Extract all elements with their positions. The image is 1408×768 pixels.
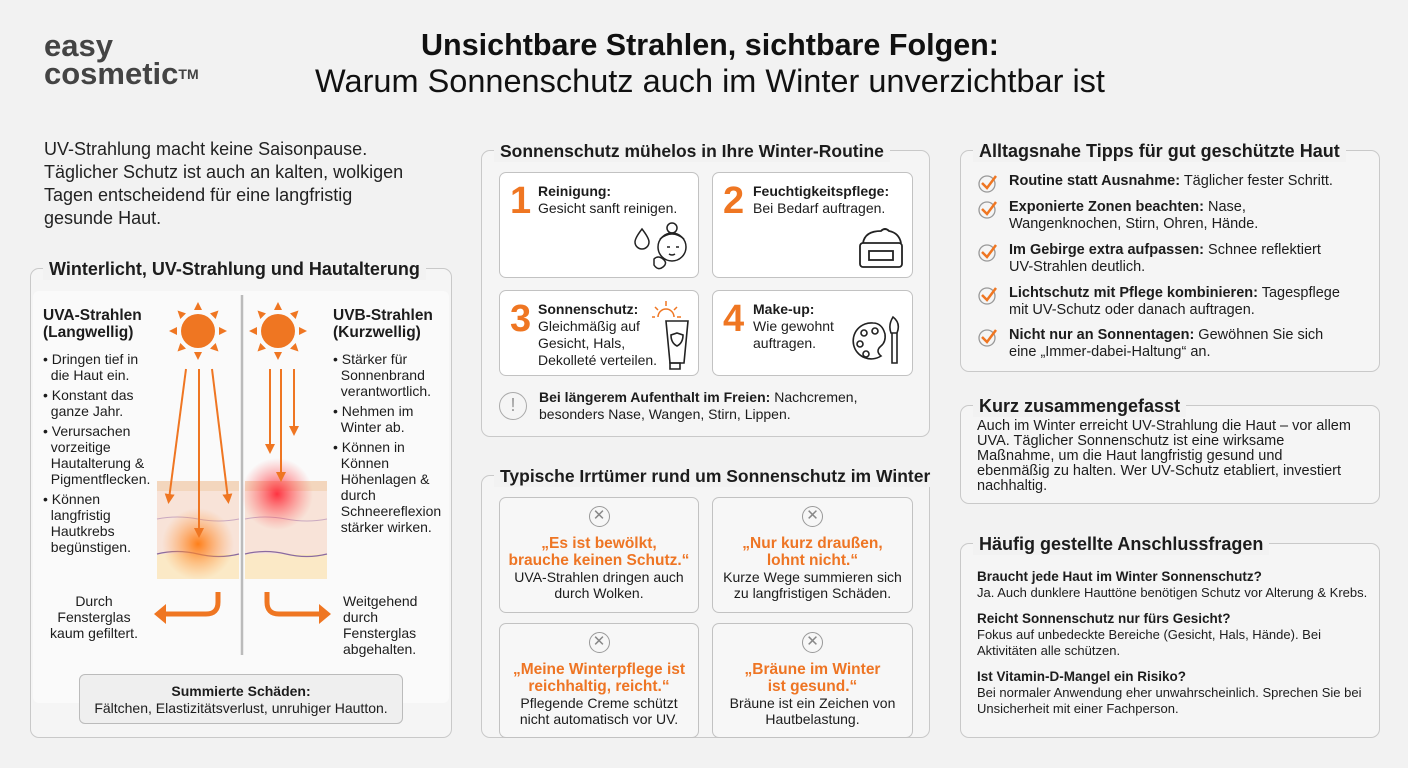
myth 2	[712, 497, 913, 613]
card 1: Gesicht sanft reinigen.	[538, 200, 677, 216]
icon: sunscreen tube	[652, 301, 689, 370]
faq list: Fokus auf unbedeckte Bereiche (Gesicht, Hals, Hände). Bei Aktivitäten alle schützen.	[977, 627, 1321, 658]
card 4: Wie gewohnt	[753, 318, 834, 334]
UVB text: verantwortlich.	[341, 383, 431, 399]
summary text: Auch im Winter erreicht UV-Strahlung die Haut – vor allem UVA. Täglicher Sonnenschutz ist eine wirksame Maßnahme, um die Haut langfristig gesund und ebenmäßig zu halten. Wer UV-Schutz etabliert, investiert nachhaltig.	[977, 418, 1351, 494]
tip 2: Exponierte Zonen beachten: Nase,	[1009, 199, 1246, 215]
myth 1: durch Wolken.	[554, 585, 644, 601]
myth 3: reichhaltig, reicht.“	[528, 678, 670, 695]
summary box: Fältchen, Elastizitätsverlust, unruhiger Hautton.	[94, 700, 388, 716]
note: reapply	[499, 389, 857, 422]
myth 2: „Nur kurz draußen,	[742, 535, 883, 552]
myth 1: ✕	[593, 507, 605, 524]
myth 1: UVA-Strahlen dringen auch	[514, 569, 684, 585]
card 1	[499, 172, 699, 278]
UVB text: • Stärker für	[333, 351, 407, 367]
panel: summary: Kurz zusammengefasst	[979, 396, 1180, 416]
UVA text: begünstigen.	[51, 539, 131, 555]
logo: cosmeticTM	[44, 56, 199, 91]
panel: summary	[960, 405, 1380, 504]
UVA text	[43, 307, 150, 555]
UVA text: • Konstant das	[43, 387, 134, 403]
UVB text: UVB-Strahlen	[333, 307, 433, 324]
summary box: Summierte Schäden:	[171, 683, 311, 699]
UVB text: • Können in	[333, 439, 405, 455]
UVA text: vorzeitige	[51, 439, 111, 455]
UVB text: • Nehmen im	[333, 403, 413, 419]
faq list: Ist Vitamin-D-Mangel ein Risiko?	[977, 669, 1186, 684]
title: Unsichtbare Strahlen, sichtbare Folgen:	[421, 28, 999, 62]
intro text: UV-Strahlung macht keine Saisonpause. Täglicher Schutz ist auch an kalten, wolkigen Tagen entscheidend für eine langfristig gesunde Haut.	[44, 139, 403, 228]
UVA text: langfristig	[51, 507, 111, 523]
panel: winter routine: Sonnenschutz mühelos in Ihre Winter-Routine	[500, 141, 884, 161]
UVB text: Sonnenbrand	[341, 367, 425, 383]
tip 2	[978, 199, 1258, 232]
myth 4: Hautbelastung.	[765, 711, 860, 727]
note: reapply: besonders Nase, Wangen, Stirn, Lippen.	[539, 406, 791, 422]
myth 3	[499, 623, 699, 738]
card 3	[499, 290, 699, 376]
tip 1: Routine statt Ausnahme: Täglicher fester Schritt.	[1009, 173, 1333, 189]
UVA text: ganze Jahr.	[51, 403, 123, 419]
UVB text: durch	[341, 487, 376, 503]
UVB text: Winter ab.	[341, 419, 405, 435]
myth 2: lohnt nicht.“	[767, 552, 858, 569]
tip 5: Nicht nur an Sonnentagen: Gewöhnen Sie sich	[1009, 327, 1323, 343]
icon: cream jar	[859, 228, 903, 268]
faq list: Bei normaler Anwendung eher unwahrscheinlich. Sprechen Sie bei Unsicherheit mit einer Fachperson.	[977, 685, 1361, 716]
card 2: 2	[723, 180, 744, 222]
myth 4: „Bräune im Winter	[745, 661, 880, 678]
logo: easy	[44, 28, 113, 63]
card 2: Feuchtigkeitspflege:	[753, 183, 889, 199]
card 4	[712, 290, 913, 376]
icon: palette brush	[852, 316, 900, 364]
tip 4: Lichtschutz mit Pflege kombinieren: Tagespflege	[1009, 285, 1340, 301]
faq list: Braucht jede Haut im Winter Sonnenschutz?	[977, 569, 1262, 584]
UVA text: Hautalterung &	[51, 455, 144, 471]
faq list	[977, 569, 1367, 716]
UVA text: • Verursachen	[43, 423, 130, 439]
card 4: 4	[723, 298, 744, 340]
tip 3	[978, 242, 1321, 275]
myth 2: ✕	[806, 507, 819, 524]
myth 4: ist gesund.“	[768, 678, 857, 695]
UVA text: die Haut ein.	[51, 367, 129, 383]
myth 3: Pflegende Creme schützt	[520, 695, 678, 711]
card 3: 3	[510, 298, 531, 340]
title	[315, 28, 1105, 99]
panel: UV comparison: Weitgehend durch Fensterglas abgehalten.	[343, 593, 417, 657]
UVB text: Schneereflexion	[341, 503, 441, 519]
myth 3: „Meine Winterpflege ist	[513, 661, 685, 678]
title: Warum Sonnenschutz auch im Winter unverzichtbar ist	[315, 63, 1105, 99]
myth 3: ✕	[593, 633, 605, 650]
panel: FAQ	[960, 543, 1380, 738]
myth 2: Kurze Wege summieren sich	[723, 569, 902, 585]
tip 2: Wangenknochen, Stirn, Ohren, Hände.	[1009, 216, 1258, 232]
panel: myths	[481, 475, 930, 738]
tip 5: eine „Immer-dabei-Haltung“ an.	[1009, 344, 1210, 360]
myth 2: zu langfristigen Schäden.	[734, 585, 891, 601]
card 1: Reinigung:	[538, 183, 611, 199]
card 3: Gleichmäßig auf	[538, 318, 640, 334]
summary box	[79, 674, 403, 724]
UVB text: stärker wirken.	[341, 519, 432, 535]
panel: myths: Typische Irrtümer rund um Sonnenschutz im Winter	[500, 466, 930, 486]
UVA text: Pigmentflecken.	[51, 471, 150, 487]
tip 3: UV-Strahlen deutlich.	[1009, 259, 1145, 275]
icon: face wash	[634, 222, 687, 270]
card 3: Sonnenschutz:	[538, 301, 638, 317]
card 1: 1	[510, 180, 531, 222]
myth 3: nicht automatisch vor UV.	[520, 711, 678, 727]
tip 5	[978, 327, 1323, 360]
note: reapply: Bei längerem Aufenthalt im Freien: Nachcremen,	[539, 389, 857, 405]
note: reapply: !	[510, 395, 516, 415]
card 4: Make-up:	[753, 301, 814, 317]
card 4: auftragen.	[753, 335, 816, 351]
myth 4: Bräune ist ein Zeichen von	[730, 695, 895, 711]
myth 1	[499, 497, 699, 613]
panel: tips: Alltagsnahe Tipps für gut geschützte Haut	[979, 141, 1340, 161]
UVA text: (Langwellig)	[43, 324, 133, 341]
panel: tips	[960, 150, 1380, 372]
faq list: Ja. Auch dunklere Hauttöne benötigen Schutz vor Alterung & Krebs.	[977, 585, 1367, 600]
UVA text: UVA-Strahlen	[43, 307, 142, 324]
window glass notes: Durch Fensterglas kaum gefiltert.	[50, 593, 138, 641]
tip 3: Im Gebirge extra aufpassen: Schnee reflektiert	[1009, 242, 1321, 258]
panel: winter routine	[481, 150, 930, 437]
tip 4	[978, 285, 1340, 318]
logo	[44, 28, 199, 91]
myth 4: ✕	[806, 633, 819, 650]
illustration: suns, rays, skin	[154, 295, 331, 655]
faq list: Reicht Sonnenschutz nur fürs Gesicht?	[977, 611, 1231, 626]
card 3: Dekolleté verteilen.	[538, 352, 657, 368]
UVA text: • Können	[43, 491, 100, 507]
UVB text	[333, 307, 441, 535]
card 2: Bei Bedarf auftragen.	[753, 200, 885, 216]
UVB text: Höhenlagen &	[341, 471, 430, 487]
panel: UV comparison: Winterlicht, UV-Strahlung und Hautalterung	[49, 259, 420, 279]
panel: FAQ: Häufig gestellte Anschlussfragen	[979, 534, 1263, 554]
myth 1: brauche keinen Schutz.“	[509, 552, 689, 569]
myth 1: „Es ist bewölkt,	[541, 535, 657, 552]
panel: UV comparison	[30, 268, 452, 738]
UVB text: (Kurzwellig)	[333, 324, 421, 341]
card 2	[712, 172, 913, 278]
UVA text: Hautkrebs	[51, 523, 115, 539]
myth 4	[712, 623, 913, 738]
card 3: Gesicht, Hals,	[538, 335, 625, 351]
tip 4: mit UV-Schutz oder danach auftragen.	[1009, 302, 1255, 318]
UVB text: Können	[341, 455, 389, 471]
UVA text: • Dringen tief in	[43, 351, 138, 367]
